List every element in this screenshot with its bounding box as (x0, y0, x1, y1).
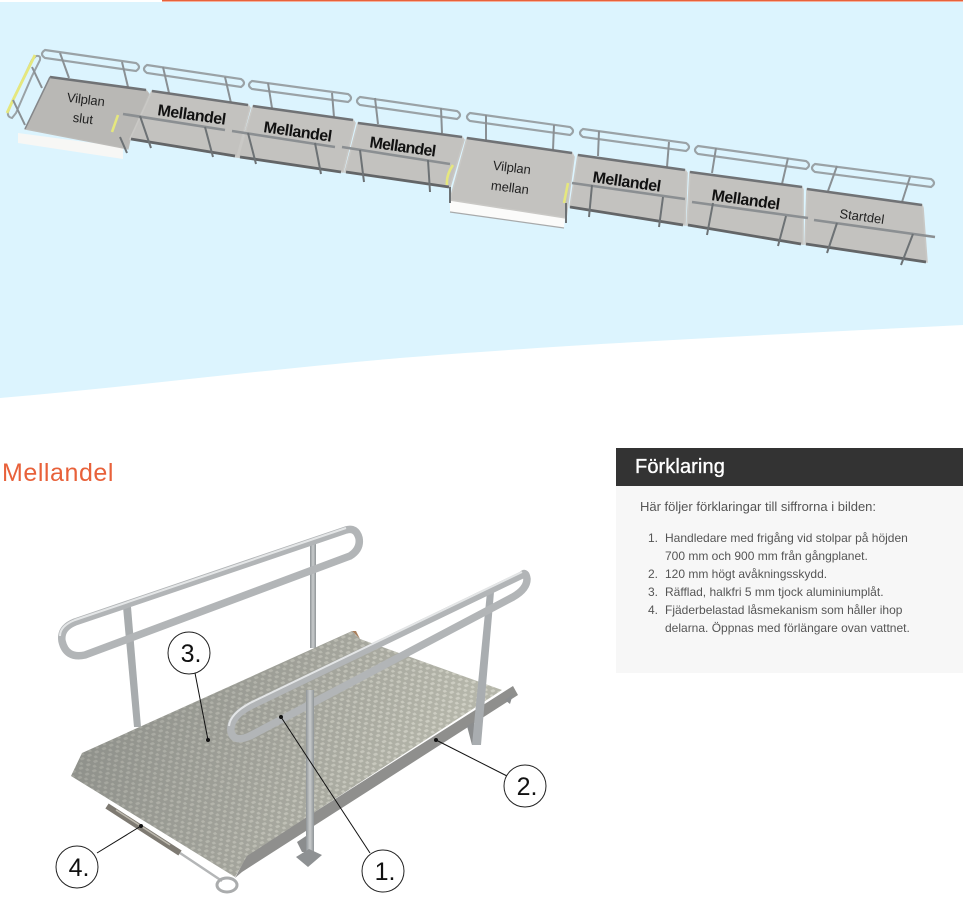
callout 1: 1. (375, 858, 395, 886)
deck plate (71, 631, 502, 877)
far handrails (42, 50, 934, 202)
panel: Vilplan mellan: mellan (490, 178, 530, 197)
legend heading (616, 448, 963, 486)
item 3 (648, 585, 884, 599)
panel: Mellandel 1: Mellandel (156, 102, 227, 129)
top accent stripe (162, 0, 963, 2)
panel: Mellandel 4 (570, 155, 687, 225)
item 4 (648, 603, 910, 635)
panel: Förklaring legend: 120 mm högt avåkningsskydd. (665, 567, 827, 581)
panel: Mellandel 3 (345, 123, 464, 187)
panel: Mellandel 1 (130, 91, 250, 157)
locking mechanism (107, 806, 237, 892)
support brackets (297, 694, 513, 852)
callout 1 (279, 715, 404, 892)
panel: Förklaring legend: 2. (648, 567, 658, 581)
title: Mellandel: Mellandel (2, 459, 114, 487)
far handrail (60, 528, 359, 727)
near handrail (229, 572, 527, 855)
ramp overview diagram (7, 50, 935, 265)
panel: Vilplan slut: slut (72, 110, 94, 127)
item 1 (648, 531, 908, 563)
panel: Vilplan mellan: Vilplan (492, 158, 532, 177)
light blue background band (0, 2, 963, 398)
legend heading: Förklaring (635, 456, 725, 478)
panel: Förklaring legend: Räfflad, halkfri 5 mm tjock aluminiumplåt. (665, 585, 884, 599)
callout 2 (434, 738, 546, 807)
panel: Mellandel 3: Mellandel (368, 134, 437, 161)
panel: Förklaring legend: 1. (648, 531, 658, 545)
item 2 (648, 567, 827, 581)
panel: Förklaring legend: 3. (648, 585, 658, 599)
panel: Mellandel 2 (238, 106, 355, 172)
callout 3 (168, 632, 210, 742)
panel: Mellandel 5: Mellandel (710, 187, 781, 214)
foot plate (296, 849, 322, 867)
callout 3: 3. (181, 640, 201, 668)
panel: Mellandel 2: Mellandel (262, 119, 333, 146)
panel: Startdel (805, 189, 927, 262)
panel: Vilplan slut: Vilplan (66, 90, 106, 109)
near handrails (112, 114, 935, 265)
panel: Mellandel 5 (687, 172, 803, 244)
panel: Förklaring legend: delarna. Öppnas med förlängare ovan vattnet. (665, 621, 910, 635)
callout 2: 2. (517, 773, 537, 801)
panel: Förklaring legend: 700 mm och 900 mm från gångplanet. (665, 549, 868, 563)
callout 4: 4. (69, 854, 89, 882)
panel: Vilplan slut (18, 77, 149, 159)
ramp section illustration (56, 528, 546, 892)
panel: Förklaring legend: Handledare med frigång vid stolpar på höjden (665, 531, 908, 545)
panel: Startdel: Startdel (839, 206, 885, 227)
panel: Förklaring legend (616, 448, 963, 673)
skirt guard (235, 686, 518, 878)
callout 4 (56, 824, 143, 888)
legend intro text: Här följer förklaringar till siffrorna i bilden: (640, 499, 876, 514)
panel: Förklaring legend: 4. (648, 603, 658, 617)
panel: Mellandel 4: Mellandel (591, 169, 662, 196)
panel: Förklaring legend: Fjäderbelastad låsmekanism som håller ihop (665, 603, 902, 617)
panel: Vilplan mellan (450, 138, 574, 228)
end handrail with yellow marking (7, 55, 42, 125)
